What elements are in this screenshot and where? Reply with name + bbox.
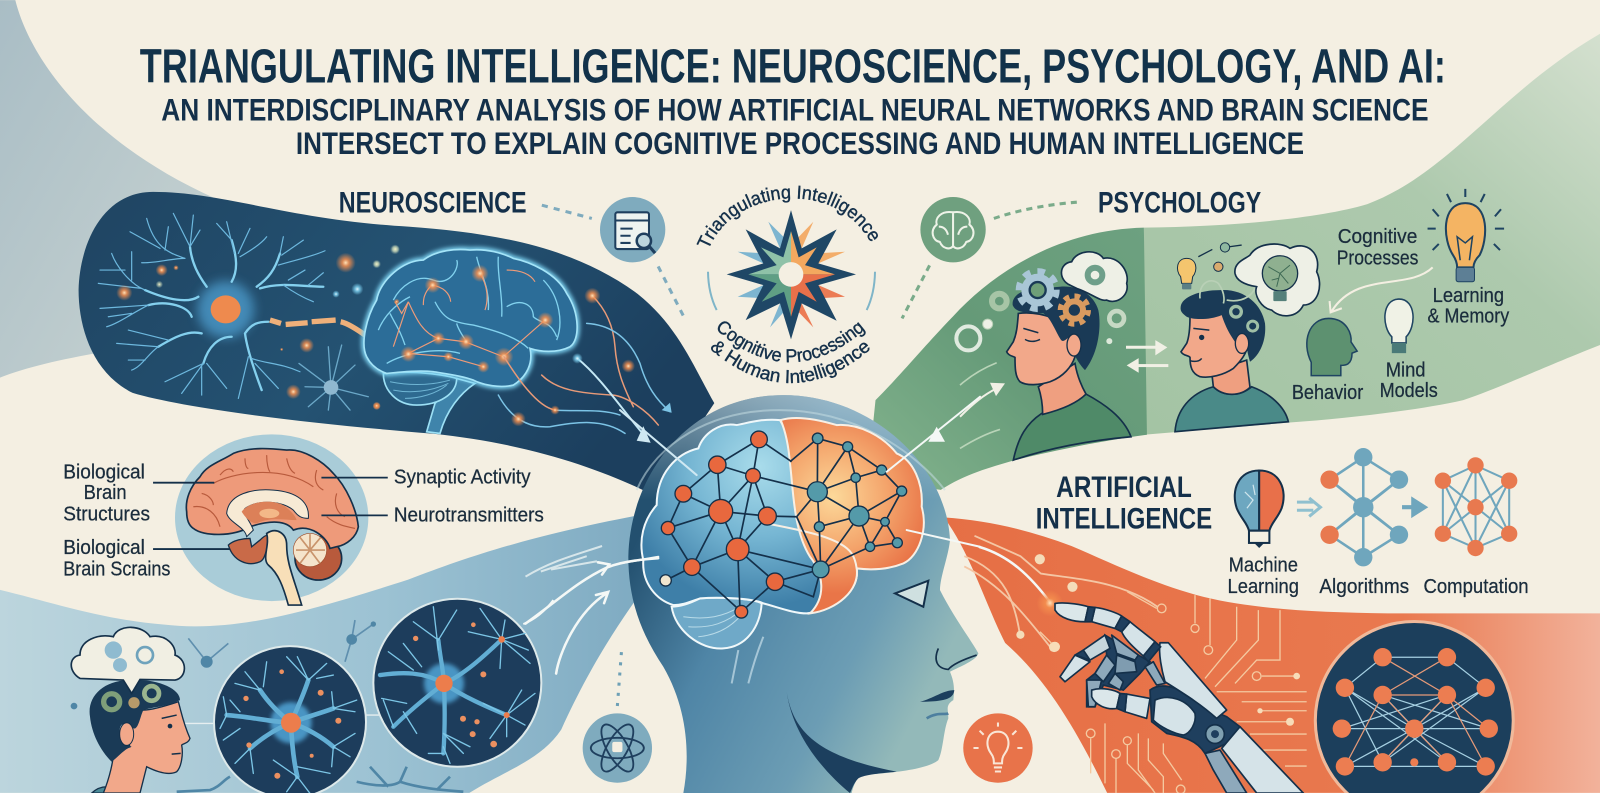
dashed connector psychology: [902, 202, 1078, 318]
emblem text top: Triangulating Intelligence: [696, 186, 878, 246]
brain stem: [427, 378, 475, 433]
soma glow 2: [424, 663, 464, 703]
pale particles: [156, 244, 400, 288]
neuron circle 1: [214, 646, 366, 793]
label: Cognitive Processes: Processes: [1337, 247, 1418, 269]
star inner lower right: [791, 274, 835, 317]
dendrite fragments: [177, 767, 463, 792]
right brain nodes: [807, 433, 907, 578]
jaw shadow: [787, 692, 897, 793]
cerebrum: [364, 250, 577, 386]
label: Mind Models: [1380, 360, 1438, 402]
index finger: [1055, 603, 1088, 622]
icon: mind bulb: [1385, 299, 1413, 353]
soma glow 1: [270, 702, 312, 743]
neuron: [98, 213, 400, 410]
emblem text bottom 1: Cognitive Processing: [718, 321, 866, 362]
brain orange: [781, 418, 924, 613]
label: Biological Brain Structures: Biological: [63, 462, 145, 484]
lower lobe: [228, 535, 272, 564]
small neuron: [299, 345, 368, 410]
thick arms 2: [380, 639, 507, 753]
icon: atom: [583, 713, 652, 783]
cerebellum back: [295, 537, 342, 580]
nerve fibres to centre: [498, 296, 670, 438]
network: algorithms: [1320, 448, 1408, 566]
axon end: [368, 337, 383, 349]
person 1: [956, 252, 1131, 460]
dendrites 2: [382, 607, 535, 763]
thalamus: [242, 502, 297, 523]
speed streaks: [526, 546, 602, 577]
label: Biological Brain Scrains: [63, 537, 170, 581]
label: Synaptic Activity: Synaptic Activity: [394, 467, 531, 489]
knuckles: [1112, 635, 1138, 660]
glow: fingertip spark: [1037, 590, 1063, 616]
labels: machine learning, algorithms, computation: Machine: [1229, 555, 1298, 577]
thought cloud: [71, 627, 184, 693]
label: Biological Brain Structures: Brain: [84, 482, 127, 504]
sagittal brain circle: [175, 434, 368, 605]
label: Learning and Memory: & Memory: [1428, 306, 1510, 328]
palm: [1153, 697, 1195, 735]
label: Learning and Memory: Learning: [1433, 285, 1504, 307]
head profile: [628, 395, 978, 793]
hand back structure: [1150, 686, 1240, 753]
motion streaks: [960, 363, 1000, 448]
label: Mind Models: Models: [1380, 380, 1438, 402]
panel: neuroscience dark: [79, 192, 714, 495]
label: Cognitive Processes: [1337, 226, 1418, 269]
person face: [103, 702, 190, 793]
head top highlight: [628, 395, 950, 557]
heading: artificial intelligence: ARTIFICIAL: [1056, 471, 1192, 504]
lower lip: [927, 713, 948, 718]
label: Mind Models: Mind: [1386, 360, 1426, 382]
left brain edges: [666, 439, 821, 612]
brain stem: [266, 531, 302, 605]
line to arrow: [523, 600, 553, 624]
middle finger: [1060, 655, 1090, 682]
arrows at brain: [620, 397, 980, 563]
left brain nodes: [660, 431, 784, 618]
gears: [956, 272, 1124, 350]
arrow: algorithms to computation: [1402, 500, 1424, 514]
cerebellum arbor: [293, 533, 327, 567]
labels: machine learning, algorithms, computation: [1228, 554, 1529, 598]
small bulb: [1177, 258, 1196, 283]
corpus callosum: [227, 490, 308, 537]
icon: large light bulb: [1428, 189, 1504, 282]
cerebrum glow: [364, 250, 577, 386]
star centre: [779, 262, 803, 287]
icon: half-brain bulb: [1235, 470, 1284, 548]
cerebellum: [383, 372, 457, 405]
pale dots: [373, 245, 399, 267]
back plate: [1160, 643, 1227, 718]
circuit traces left of hand: [964, 536, 1158, 648]
fibre glows: [373, 288, 635, 426]
labels: machine learning, algorithms, computation: Learning: [1228, 576, 1299, 598]
label: Behavior: Behavior: [1292, 382, 1363, 404]
neck lines: [732, 637, 763, 683]
robot hand with traces: [1040, 592, 1307, 793]
exchange arrows: [1126, 340, 1168, 373]
heading: artificial intelligence: INTELLIGENCE: [1036, 503, 1212, 536]
label: Learning and Memory: [1428, 285, 1510, 328]
brain folds: [193, 455, 355, 528]
person hair: [90, 680, 180, 762]
wrist joint: [1206, 725, 1224, 743]
panel: lower-left blue band: [0, 515, 638, 793]
label: Biological Brain Structures: Structures: [63, 503, 150, 525]
star inner upper right: [791, 231, 835, 274]
sulci: [378, 257, 560, 363]
label: Neurotransmitters: Neurotransmitters: [394, 505, 544, 527]
star navy: [727, 210, 856, 339]
lower-left scene: person and neuron circles: [71, 599, 553, 793]
label: Cognitive Processes: Cognitive: [1338, 226, 1417, 248]
blue particles: [332, 283, 363, 298]
synapse glows: [394, 265, 553, 373]
blue terminal: [572, 353, 583, 364]
glowing particles: [116, 253, 381, 410]
connectors: [183, 715, 380, 723]
thick arms 1: [227, 680, 333, 777]
brain blue: [641, 420, 857, 613]
head gears: [1231, 306, 1241, 317]
arrow: bulb to network: [1297, 498, 1320, 516]
panel: artificial intelligence orange: [944, 517, 1600, 793]
nose: [936, 648, 977, 669]
brain in panel: [364, 245, 672, 438]
arrow: bulb to behavior: [1330, 267, 1433, 312]
inner ring: [637, 410, 945, 490]
forearm: [1222, 727, 1303, 793]
dendrites 1: [220, 657, 357, 793]
background shape: top-left grey: [0, 0, 214, 378]
person ear: [120, 723, 134, 745]
label: Biological Brain Structures: [63, 462, 150, 525]
person 2: [1175, 243, 1320, 432]
neuron circle 2: [373, 599, 541, 767]
thumb: [1092, 689, 1120, 709]
axon segments: [270, 320, 368, 337]
heading: artificial intelligence: [1036, 471, 1212, 536]
icon: brain in green circle: [920, 197, 986, 262]
icon: orange light bulb: [963, 713, 1033, 783]
background shape: top-right green: [1144, 34, 1600, 435]
neuron branches: [98, 213, 325, 398]
star inner lower left: [748, 274, 791, 317]
circuit pads left of hand: [1016, 554, 1078, 652]
thought cloud: [1061, 252, 1127, 301]
circuit traces: [1040, 592, 1307, 793]
leader lines: [153, 478, 388, 549]
central brain: [620, 397, 980, 649]
person body: [92, 787, 115, 793]
cerebellum: [672, 598, 762, 649]
network: computation: [1435, 457, 1517, 556]
emblem text bottom 2: & Human Intelligence: [711, 341, 870, 384]
icon: behavior head: [1307, 318, 1357, 376]
star inner left: [748, 231, 791, 274]
icon: document magnifier: [600, 197, 665, 262]
temporal arc: [767, 523, 857, 568]
neuron glow: [197, 281, 254, 338]
right brain edges: [790, 438, 902, 569]
thought loops: [1200, 278, 1255, 303]
knuckle backing: [1087, 635, 1150, 707]
labels: machine learning, algorithms, computation: Algorithms: [1319, 576, 1409, 598]
heading: subtitle line 2: INTERSECT TO EXPLAIN COGNITIVE PROCESSING AND HUMAN INTELLIGENCE: [296, 125, 1304, 161]
arrows into central brain: [526, 547, 1050, 674]
panel: psychology dark green: [867, 228, 1147, 490]
neuron primary arms: [145, 240, 323, 390]
gears on hair: [104, 694, 120, 710]
emblem: triangulating star: [696, 186, 878, 384]
label: Biological Brain Scrains: Biological: [63, 537, 145, 559]
lips: [920, 690, 954, 702]
star back spikes: [738, 222, 845, 327]
dotted connector to atom: [617, 652, 621, 706]
brain body: [186, 449, 358, 548]
label: Biological Brain Scrains: Brain Scrains: [63, 559, 170, 581]
dashed connector neuroscience: [542, 205, 686, 320]
neuron soma: [211, 295, 241, 323]
labels: machine learning, algorithms, computation: Computation: [1423, 576, 1529, 598]
heading: neuroscience: NEUROSCIENCE: [339, 186, 527, 219]
emblem side arcs: [708, 272, 875, 310]
network circle: [1315, 622, 1513, 793]
fiery synapse lines: [393, 270, 545, 367]
cloud with bulb: [1235, 244, 1320, 316]
eye: [895, 581, 928, 607]
heading: psychology: PSYCHOLOGY: [1098, 186, 1261, 219]
